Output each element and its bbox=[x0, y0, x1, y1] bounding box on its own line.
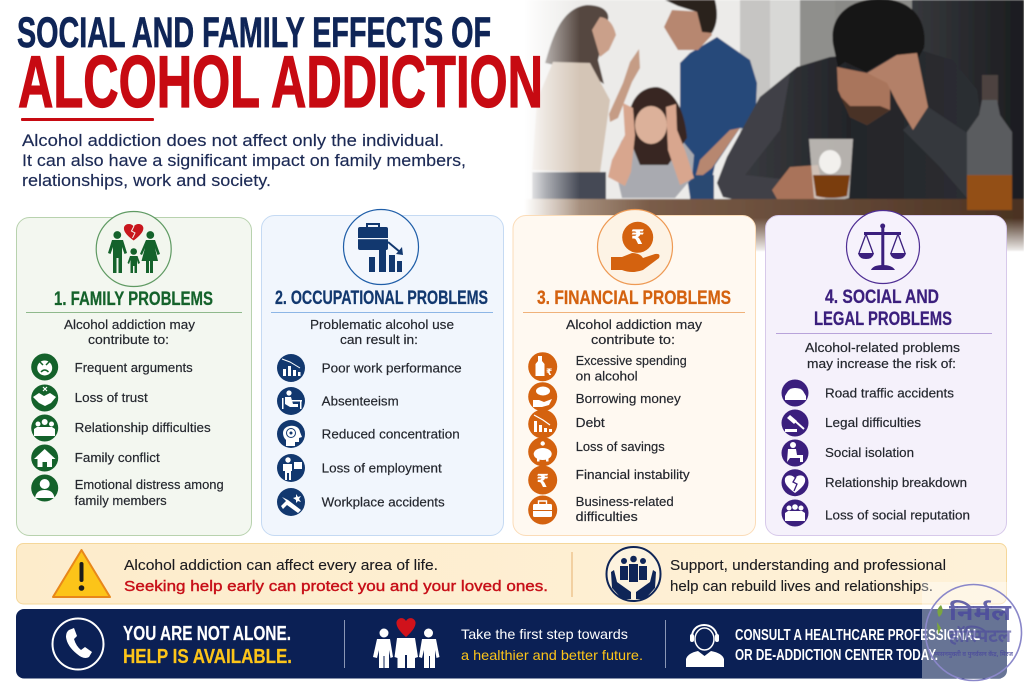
list item: financial instability: ₹ bbox=[536, 471, 549, 492]
list item: loss of employment bbox=[277, 454, 442, 482]
list item: reduced concentration bbox=[277, 420, 460, 448]
list item: social isolation: Social isolation bbox=[825, 445, 914, 460]
list item: excessive spending: Excessive spending bbox=[576, 353, 687, 368]
list item: debt: Debt bbox=[576, 415, 605, 430]
list item: loss of trust bbox=[31, 384, 148, 412]
list item: relationship difficulties bbox=[31, 414, 211, 442]
intro text bbox=[566, 317, 703, 347]
watermark: Nirmal Hospital logo bbox=[922, 582, 1022, 680]
heading: 2. OCCUPATIONAL PROBLEMS bbox=[275, 288, 488, 309]
intro text bbox=[64, 317, 196, 347]
icon: warning triangle bbox=[53, 550, 110, 597]
list item: workplace accidents: Workplace accidents bbox=[322, 494, 445, 510]
heading: 1. FAMILY PROBLEMS bbox=[54, 289, 213, 310]
intro text: contribute to: bbox=[88, 332, 169, 347]
list item: business difficulties: difficulties bbox=[576, 509, 638, 524]
list item: debt bbox=[528, 410, 605, 438]
consult text bbox=[735, 627, 980, 664]
intro text bbox=[310, 317, 454, 347]
intro text: Alcohol addiction may bbox=[64, 317, 196, 332]
icon: phone bbox=[52, 618, 104, 670]
list item: borrowing money bbox=[528, 382, 681, 411]
photo: family argument and distressed man drinking bbox=[505, 0, 1024, 255]
intro paragraph: Alcohol addiction does not affect only the individual. bbox=[22, 132, 444, 150]
list item: frequent arguments: Frequent arguments bbox=[75, 360, 193, 375]
intro text: Problematic alcohol use bbox=[310, 317, 454, 332]
bottle bbox=[967, 75, 1012, 212]
icon: scales of justice bbox=[846, 210, 920, 284]
list item: absenteeism bbox=[277, 387, 399, 415]
logo name line 2: हॉस्पिटल bbox=[949, 626, 1012, 650]
list item: poor work performance: Poor work performance bbox=[322, 360, 462, 376]
list item: poor work performance bbox=[277, 354, 462, 382]
intro text: contribute to: bbox=[591, 332, 675, 347]
next step text: a healthier and better future. bbox=[461, 647, 643, 663]
list item: emotional distress: Emotional distress among bbox=[75, 477, 224, 492]
girl covering ears bbox=[608, 87, 694, 198]
logo tagline: व्यसनमुक्ती व पुनर्वसन केंद्र, मिरज bbox=[933, 650, 1013, 659]
whisky glass bbox=[809, 139, 853, 200]
intro text: may increase the risk of: bbox=[807, 356, 956, 371]
message text: Alcohol addiction can affect every area of life. bbox=[124, 557, 438, 574]
red title rule bbox=[21, 118, 154, 121]
icon: people with heart bbox=[373, 618, 440, 668]
next step text: Take the first step towards bbox=[461, 626, 628, 642]
panel: financial problems bbox=[513, 210, 756, 536]
heading: 3. FINANCIAL PROBLEMS bbox=[537, 288, 731, 309]
list item: excessive spending bbox=[528, 352, 687, 384]
leaf mark bbox=[937, 605, 943, 635]
logo name line 1: निर्मल bbox=[949, 600, 1012, 629]
list item: loss of social reputation: Loss of social reputation bbox=[825, 508, 970, 523]
panel: family problems bbox=[16, 212, 252, 536]
intro paragraph: It can also have a significant impact on family members, bbox=[22, 152, 466, 170]
panel: occupational problems bbox=[262, 210, 504, 536]
icon: briefcase and falling chart bbox=[344, 210, 418, 284]
help text bbox=[123, 623, 292, 668]
list item: frequent arguments bbox=[31, 354, 193, 380]
panel: key message banner bbox=[16, 544, 1006, 604]
heading: LEGAL PROBLEMS bbox=[814, 309, 952, 330]
table bbox=[525, 199, 1024, 251]
list item: absenteeism: Absenteeism bbox=[322, 394, 399, 408]
message text: Seeking help early can protect you and your loved ones. bbox=[124, 578, 548, 595]
support text bbox=[670, 557, 946, 595]
intro paragraph bbox=[22, 132, 466, 190]
list item: business difficulties bbox=[528, 494, 674, 524]
list item: workplace accidents bbox=[277, 488, 445, 516]
list item: loss of social reputation bbox=[782, 500, 970, 526]
list item: emotional distress: family members bbox=[75, 493, 167, 508]
heading: 4. SOCIAL AND bbox=[825, 287, 939, 308]
intro text: Alcohol-related problems bbox=[805, 340, 961, 355]
man in blue shirt bbox=[664, 0, 757, 199]
icon: hands supporting people bbox=[606, 547, 660, 601]
woman bbox=[532, 5, 640, 199]
list item: financial instability: Financial instability bbox=[576, 467, 690, 482]
list item: relationship breakdown: Relationship breakdown bbox=[825, 475, 967, 490]
list item: relationship difficulties: Relationship difficulties bbox=[75, 420, 211, 435]
icon: rupee coin over hand: ₹ bbox=[631, 225, 645, 249]
list item: reduced concentration: Reduced concentration bbox=[322, 427, 460, 442]
list item: emotional distress bbox=[31, 474, 224, 508]
intro text: Alcohol addiction may bbox=[566, 317, 703, 332]
support text: Support, understanding and professional bbox=[670, 557, 946, 574]
list item: legal difficulties bbox=[782, 410, 922, 436]
list item: road traffic accidents: Road traffic accidents bbox=[825, 386, 955, 401]
help text: HELP IS AVAILABLE. bbox=[123, 646, 292, 668]
intro text bbox=[805, 340, 961, 371]
message text bbox=[124, 557, 548, 595]
consult text: OR DE-ADDICTION CENTER TODAY. bbox=[735, 647, 938, 664]
list item: relationship breakdown bbox=[782, 469, 967, 496]
list item: borrowing money: Borrowing money bbox=[576, 391, 681, 406]
panel: social and legal problems bbox=[766, 210, 1006, 536]
list item: loss of employment: Loss of employment bbox=[322, 461, 442, 476]
distressed man bbox=[717, 0, 980, 213]
list item: loss of savings: Loss of savings bbox=[576, 439, 665, 454]
panel: help banner bbox=[16, 609, 1007, 678]
icon: rupee coin over hand bbox=[598, 210, 672, 284]
list item: family conflict bbox=[31, 444, 160, 472]
list item: legal difficulties: Legal difficulties bbox=[825, 415, 922, 430]
list item: financial instability bbox=[528, 466, 690, 494]
list item: road traffic accidents bbox=[782, 380, 955, 406]
list item: excessive spending: on alcohol bbox=[576, 369, 638, 384]
intro paragraph: relationships, work and society. bbox=[22, 172, 271, 190]
list item: loss of trust: Loss of trust bbox=[75, 390, 148, 405]
intro text: can result in: bbox=[340, 332, 418, 347]
icon: broken family bbox=[96, 212, 171, 286]
list item: business difficulties: Business-related bbox=[576, 494, 674, 509]
title line 2: ALCOHOL ADDICTION bbox=[18, 42, 543, 123]
list item: loss of savings bbox=[528, 437, 665, 466]
icon: healthcare agent with headset bbox=[686, 625, 724, 667]
title line 1: SOCIAL AND FAMILY EFFECTS OF bbox=[17, 9, 491, 57]
list item: excessive spending: ₹ bbox=[546, 368, 552, 378]
list item: social isolation bbox=[782, 440, 914, 466]
heading bbox=[814, 287, 952, 330]
next step text bbox=[461, 626, 643, 663]
support text: help can rebuild lives and relationships. bbox=[670, 578, 933, 595]
list item: family conflict: Family conflict bbox=[75, 450, 160, 465]
title bbox=[17, 9, 543, 123]
help text: YOU ARE NOT ALONE. bbox=[123, 623, 291, 645]
